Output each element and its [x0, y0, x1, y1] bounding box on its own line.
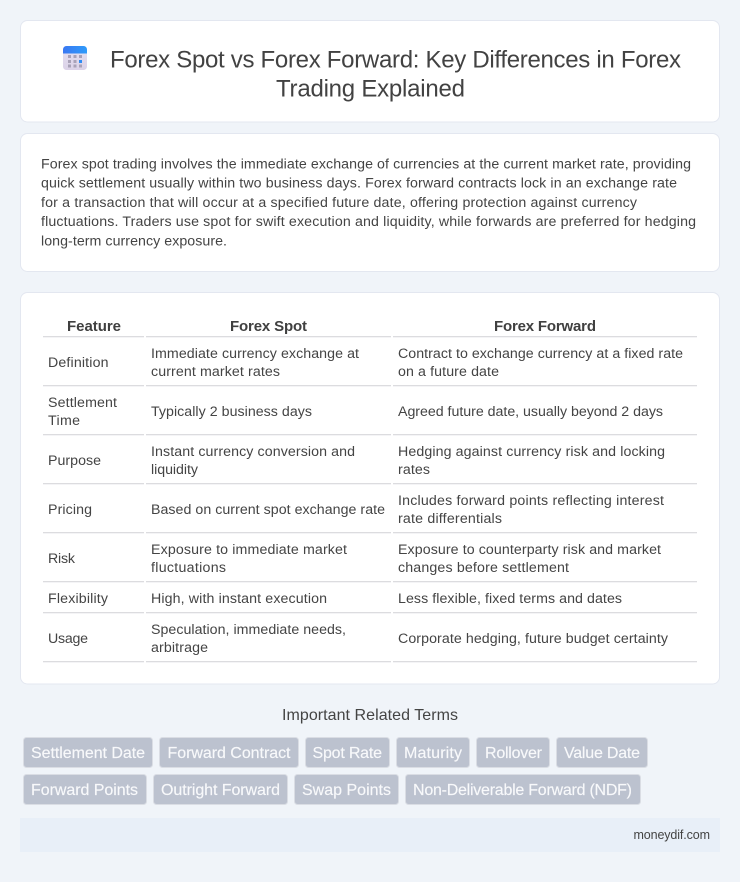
row: purpose: rates [398, 462, 430, 478]
row: pricing: Based on current spot exchange rate [151, 502, 385, 518]
row: risk: Exposure to counterparty risk and market [398, 542, 661, 558]
row: purpose: Hedging against currency risk and locking [398, 444, 665, 460]
table header: Feature [67, 318, 121, 335]
text block: description: Forex spot trading involves the immediate exchange of currencies at the current market rate, providing [41, 156, 691, 172]
row: settlement time: Typically 2 business days [151, 404, 312, 420]
row: risk [43, 542, 697, 582]
row: settlement time: Settlement [48, 395, 117, 411]
row: pricing [43, 493, 697, 533]
row: risk: Risk [48, 551, 76, 567]
table header: Forex Forward [494, 318, 596, 335]
row: risk: changes before settlement [398, 560, 569, 576]
text block: description: quick settlement usually within two business days. Forex forward contracts lock in an exchange rate [41, 176, 677, 192]
row: usage: arbitrage [151, 640, 208, 656]
row: flexibility: High, with instant execution [151, 591, 327, 607]
panel: related term tags [24, 738, 648, 804]
row: definition: Immediate currency exchange at [151, 346, 359, 362]
row: pricing: Pricing [48, 502, 92, 518]
row: definition: on a future date [398, 364, 499, 380]
tag: maturity [396, 738, 470, 768]
tag: outright forward: Outright Forward [161, 782, 280, 799]
tag: forward contract: Forward Contract [168, 745, 291, 762]
tag: value date: Value Date [564, 745, 640, 762]
row: definition: Contract to exchange currency at a fixed rate [398, 346, 683, 362]
row: usage: Corporate hedging, future budget certainty [398, 631, 669, 647]
tag: outright forward [154, 774, 288, 804]
row: flexibility [43, 591, 697, 613]
text block: description: long-term currency exposure. [41, 234, 227, 250]
row: purpose: Instant currency conversion and [151, 444, 355, 460]
tag: swap points: Swap Points [302, 782, 391, 799]
tag: maturity: Maturity [404, 745, 462, 762]
row: definition: current market rates [151, 364, 280, 380]
panel: comparison table [20, 292, 720, 684]
row: purpose: liquidity [151, 462, 199, 478]
heading: related terms: Important Related Terms [282, 707, 458, 724]
row: settlement time: Time [48, 413, 80, 429]
title: Trading Explained [276, 76, 465, 102]
tag: spot rate [306, 738, 390, 768]
table header: Forex Spot [230, 318, 307, 335]
tag: settlement date: Settlement Date [31, 745, 145, 762]
tag: rollover [476, 738, 550, 768]
row: usage: Speculation, immediate needs, [151, 622, 346, 638]
panel: title header [20, 20, 720, 122]
table header [43, 318, 697, 337]
row: settlement time: Agreed future date, usually beyond 2 days [398, 404, 663, 420]
tag: non-deliverable forward [406, 774, 640, 804]
text block: description: for a transaction that will occur at a specified future date, offering protection against currency [41, 195, 638, 211]
footer [20, 818, 720, 852]
row: purpose [43, 444, 697, 484]
tag: forward points: Forward Points [31, 782, 138, 799]
title: Forex Spot vs Forex Forward: Key Differences in Forex [110, 46, 681, 74]
row: flexibility: Flexibility [48, 591, 109, 607]
tag: forward points [24, 774, 146, 804]
row: risk: Exposure to immediate market [151, 542, 347, 558]
tag: settlement date [24, 738, 152, 768]
tag: forward contract [160, 738, 298, 768]
row: risk: fluctuations [151, 560, 226, 576]
row: usage: Usage [48, 631, 88, 647]
icon: calendar [63, 46, 87, 70]
tag: rollover: Rollover [485, 745, 543, 762]
tag: value date [556, 738, 648, 768]
tag: spot rate: Spot Rate [312, 745, 382, 762]
text block: description [41, 156, 696, 250]
panel: description [20, 134, 720, 272]
row: purpose: Purpose [48, 453, 101, 469]
footer: moneydif.com [634, 828, 710, 842]
row: definition [43, 346, 697, 386]
tag: non-deliverable forward: Non-Deliverable Forward (NDF) [413, 782, 632, 799]
title [110, 46, 681, 102]
tag: swap points [294, 774, 398, 804]
row: pricing: rate differentials [398, 511, 502, 527]
text block: description: fluctuations. Traders use spot for swift execution and liquidity, while forwards are preferred for hedging [41, 214, 696, 230]
row: usage [43, 622, 697, 662]
row: pricing: Includes forward points reflecting interest [398, 493, 664, 509]
row: definition: Definition [48, 355, 108, 371]
row: settlement time [43, 395, 697, 435]
row: flexibility: Less flexible, fixed terms and dates [398, 591, 622, 607]
